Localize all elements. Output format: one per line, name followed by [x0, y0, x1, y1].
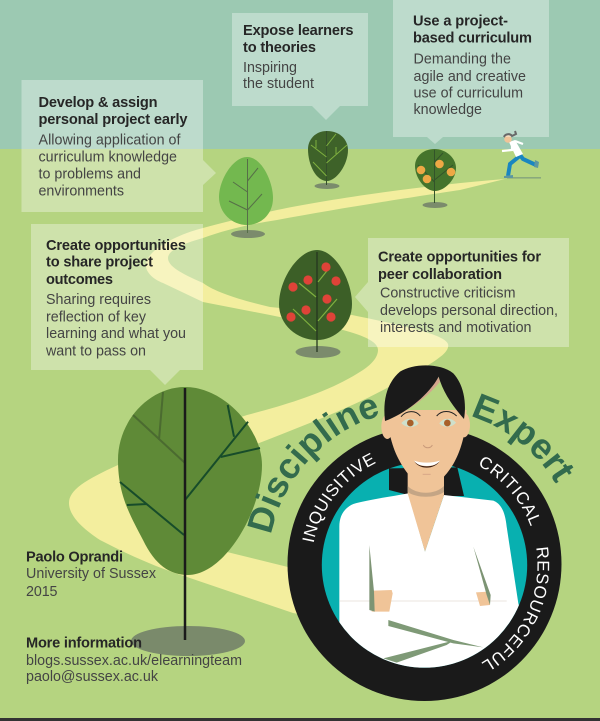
panel: project-based curriculum: based curriculum: [413, 30, 532, 46]
panel: expose learners: to theories: [243, 40, 316, 56]
footer bar: [0, 718, 600, 721]
winding path: [69, 179, 505, 620]
panel: share project outcomes: outcomes: [46, 272, 113, 288]
panel: share project outcomes: reflection of key: [46, 310, 147, 326]
ring word: resourceful: RESOURCEFUL: [482, 547, 550, 670]
ring: [288, 427, 562, 701]
panel: develop and assign: Allowing application of: [38, 132, 181, 148]
panel: develop and assign: Develop & assign: [38, 95, 158, 111]
ring word: critical: CRITICAL: [480, 457, 540, 526]
tree: orange fruit: [415, 149, 456, 208]
heading: Expert: Expert: [472, 394, 574, 484]
ring word: inquisitive: INQUISITIVE: [302, 452, 376, 542]
panel: peer collaboration: develops personal direction,: [380, 303, 558, 319]
panel: develop and assign: environments: [38, 184, 124, 200]
panel: share project outcomes: learning and what you: [46, 326, 186, 342]
panel: peer collaboration: peer collaboration: [378, 267, 502, 283]
author credit: University of Sussex: [26, 566, 156, 582]
panel: peer collaboration: Constructive criticism: [380, 286, 516, 302]
tree: light green: [219, 157, 273, 238]
panel: project-based curriculum: [393, 0, 549, 144]
runner: [502, 131, 541, 179]
panel: peer collaboration: interests and motivation: [380, 320, 532, 336]
panel: share project outcomes: [31, 224, 203, 385]
panel: develop and assign: to problems and: [38, 166, 141, 182]
grass background: [0, 149, 600, 717]
sky background: [0, 0, 600, 149]
panel: project-based curriculum: knowledge: [414, 102, 482, 118]
panel: develop and assign: personal project early: [38, 112, 188, 128]
panel: develop and assign: [22, 80, 216, 212]
teal disc: [322, 462, 527, 668]
portrait: [339, 365, 519, 668]
panel: project-based curriculum: Demanding the: [414, 52, 511, 68]
panel: peer collaboration: Create opportunities for: [378, 250, 541, 266]
panel: project-based curriculum: use of curriculum: [414, 86, 523, 102]
panel: project-based curriculum: Use a project-: [413, 14, 508, 30]
panel: expose learners: [232, 13, 368, 120]
panel: expose learners: Expose learners: [243, 23, 354, 39]
author credit: Paolo Oprandi: [26, 550, 123, 566]
author credit: [26, 550, 156, 600]
author credit: 2015: [26, 584, 58, 600]
panel: expose learners: Inspiring: [243, 60, 297, 76]
panel: peer collaboration: [355, 238, 569, 347]
panel: expose learners: the student: [243, 76, 314, 92]
panel: project-based curriculum: agile and creative: [414, 69, 526, 85]
heading: Discipline: Discipline: [247, 400, 378, 533]
more information: blogs.sussex.ac.uk/elearningteam: [26, 653, 242, 669]
tree: dark leaves: [308, 131, 348, 189]
panel: share project outcomes: Create opportunities: [46, 238, 186, 254]
expert badge: [288, 365, 562, 701]
more information: paolo@sussex.ac.uk: [26, 669, 159, 685]
tree: large: [118, 387, 262, 656]
panel: share project outcomes: Sharing requires: [46, 292, 151, 308]
panel: share project outcomes: want to pass on: [45, 344, 146, 360]
panel: develop and assign: curriculum knowledge: [38, 150, 177, 166]
more information: More information: [26, 636, 142, 652]
tree: red fruit: [279, 250, 352, 358]
panel: share project outcomes: to share project: [46, 255, 153, 271]
more information: [26, 636, 242, 685]
